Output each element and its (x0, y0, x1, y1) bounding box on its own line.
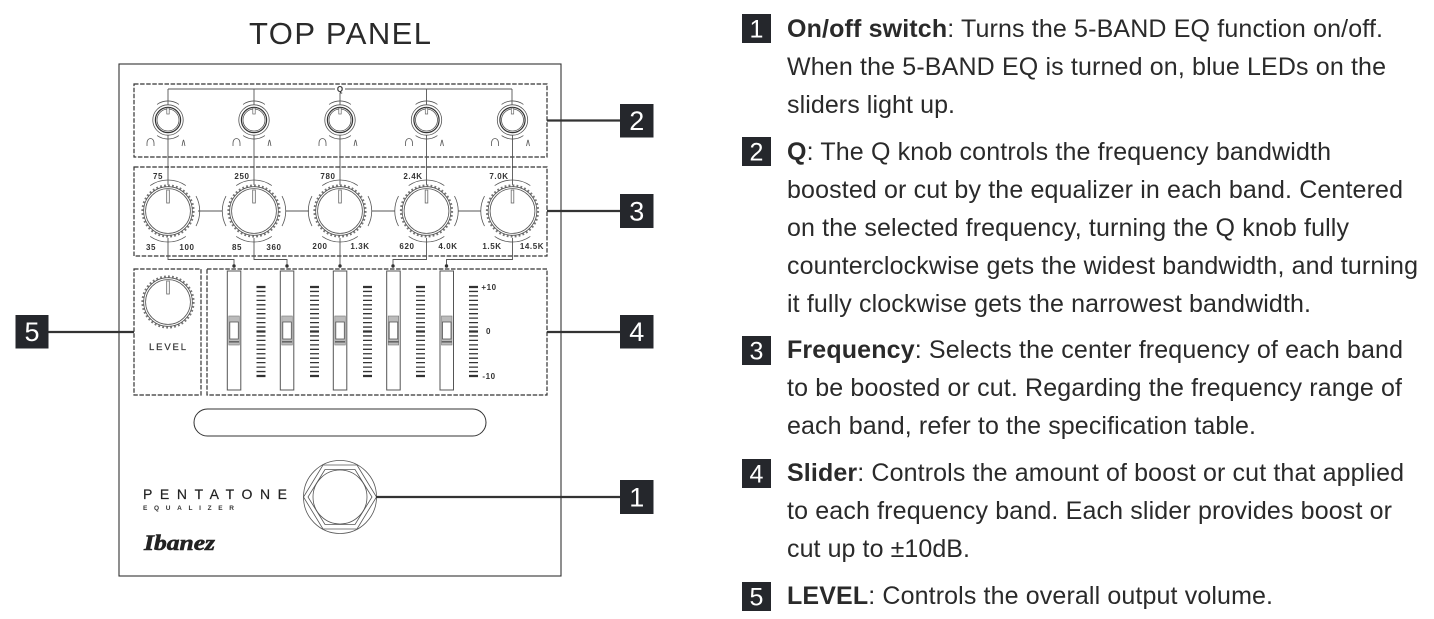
callout 4 (547, 315, 654, 348)
frequency labels: 4.0K (438, 242, 458, 251)
scale labels: +10 (481, 283, 497, 292)
knobs: Q (147, 101, 530, 146)
slider scale ticks (256, 287, 478, 376)
description 3: Frequency: to be boosted or cut. Regarding the frequency range of (787, 374, 1402, 402)
label: LEVEL: LEVEL (149, 342, 186, 353)
frequency labels: 35 (146, 243, 156, 252)
description 1: On/off switch: 1 (750, 16, 763, 44)
callout 1 (376, 480, 654, 514)
callout 3 (547, 194, 654, 228)
description 4: Slider: Slider: Controls the amount of boost or cut that applied (787, 459, 1404, 487)
display slot (194, 409, 486, 436)
frequency labels: 75 (153, 172, 163, 181)
description 5: LEVEL: LEVEL: Controls the overall output volume. (787, 582, 1273, 610)
callout 5 (16, 315, 134, 348)
description 2: Q: boosted or cut by the equalizer in each band. Centered (787, 176, 1403, 204)
callout 4: 4 (629, 317, 644, 347)
label: Q: Q (337, 85, 343, 94)
connector lines: Q knobs to frequency knobs (168, 135, 512, 185)
callout 5: 5 (24, 317, 40, 347)
description 2: Q: counterclockwise gets the widest bandwidth, and turning (787, 252, 1418, 280)
description 3: Frequency: 3 (750, 338, 763, 366)
description 1: On/off switch: sliders light up. (787, 91, 955, 119)
description 1: On/off switch: When the 5-BAND EQ is turned on, blue LEDs on the (787, 53, 1386, 81)
logo: PENTATONE EQUALIZER: PENTATONE (143, 486, 287, 502)
panel: Q section (134, 84, 547, 157)
sliders (227, 271, 454, 390)
frequency labels: 200 (312, 242, 328, 251)
description 3: Frequency (742, 336, 1403, 440)
panel: pedal top panel outline (119, 64, 561, 576)
description 2: Q: on the selected frequency, turning the Q knob fully (787, 214, 1350, 242)
footswitch (304, 460, 376, 534)
knobs: frequency (142, 180, 538, 242)
description 2: Q: Q: The Q knob controls the frequency bandwidth (787, 138, 1331, 166)
description 4: Slider (742, 459, 1404, 563)
description 4: Slider: cut up to ±10dB. (787, 535, 970, 563)
description 5: LEVEL: 5 (750, 584, 763, 612)
frequency labels: 1.3K (350, 242, 370, 251)
title: TOP PANEL (249, 16, 431, 51)
description 2: Q: 2 (750, 138, 763, 166)
description 4: Slider: 4 (750, 460, 764, 488)
scale labels: 0 (486, 327, 491, 336)
frequency labels: 1.5K (482, 242, 502, 251)
description 3: Frequency: each band, refer to the specification table. (787, 412, 1256, 440)
description 2: Q: it fully clockwise gets the narrowest bandwidth. (787, 290, 1311, 318)
panel: slider section (207, 269, 547, 395)
logo: Ibanez: Ibanez (143, 530, 216, 555)
callout 3: 3 (629, 196, 644, 226)
description 2: Q (742, 137, 1418, 318)
scale labels: -10 (482, 372, 496, 381)
frequency labels: 360 (266, 243, 282, 252)
description 4: Slider: to each frequency band. Each slider provides boost or (787, 497, 1392, 525)
logo: PENTATONE EQUALIZER: EQUALIZER (143, 505, 234, 512)
scale labels (481, 283, 497, 381)
frequency labels (146, 172, 544, 252)
frequency labels: 620 (399, 242, 415, 251)
callout 2: 2 (629, 106, 644, 136)
frequency labels: 85 (232, 243, 242, 252)
frequency labels: 2.4K (403, 172, 423, 181)
description 3: Frequency: Frequency: Selects the center frequency of each band (787, 336, 1403, 364)
frequency labels: 100 (179, 243, 195, 252)
description 1: On/off switch (742, 14, 1386, 119)
panel: frequency section (134, 167, 547, 256)
connector lines: frequency knobs to sliders (168, 238, 512, 268)
panel: LEVEL section (134, 269, 201, 395)
logo: PENTATONE EQUALIZER (143, 486, 287, 512)
callout 1: 1 (629, 482, 644, 512)
frequency labels: 780 (320, 172, 336, 181)
knob: level (142, 276, 194, 328)
frequency labels: 250 (234, 172, 250, 181)
frequency labels: 14.5K (520, 242, 544, 251)
frequency labels: 7.0K (489, 172, 509, 181)
description 1: On/off switch: On/off switch: Turns the 5-BAND EQ function on/off. (787, 15, 1383, 43)
callout 2 (547, 104, 654, 138)
